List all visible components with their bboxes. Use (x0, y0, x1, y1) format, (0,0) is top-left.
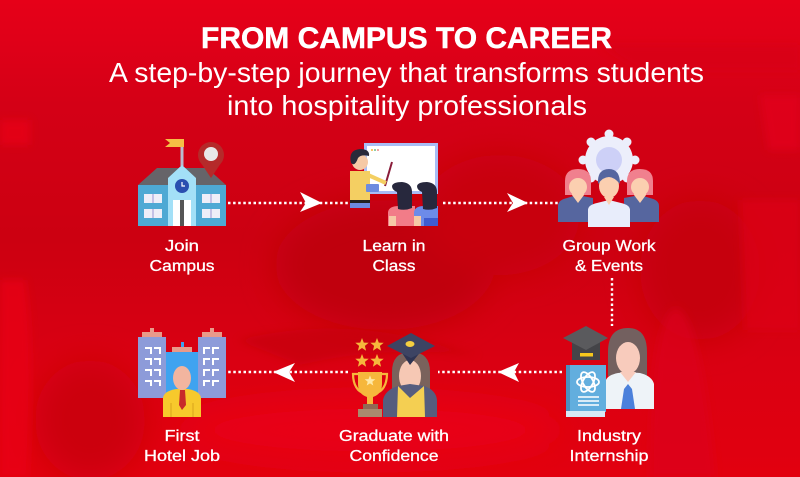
label: first hotel job: Hotel Job (144, 448, 220, 465)
label: learn in class: Class (372, 258, 416, 275)
icon: hotel building with employee (138, 328, 226, 417)
label: industry internship (570, 428, 649, 465)
label: join campus: Campus (150, 258, 214, 275)
title: FROM CAMPUS TO CAREER (201, 22, 612, 55)
subtitle: A step-by-step journey that transforms students (109, 57, 704, 88)
icon: graduate with trophy and stars (353, 333, 437, 417)
label: learn in class (362, 238, 426, 275)
icon: teacher at whiteboard with students (350, 143, 438, 226)
label: join campus: Join (165, 238, 199, 255)
arrow: join campus to learn in class (228, 192, 348, 212)
subtitle: into hospitality professionals (227, 90, 587, 121)
label: group work and events: & Events (575, 258, 643, 275)
label: join campus (150, 238, 214, 275)
icon: team with gear (558, 130, 659, 227)
arrow: learn in class to group work (443, 193, 558, 212)
label: group work and events (562, 238, 657, 275)
subtitle (109, 57, 704, 121)
label: first hotel job: First (164, 428, 200, 445)
label: first hotel job (144, 428, 220, 465)
icon: school with location pin (138, 139, 226, 226)
label: group work and events: Group Work (562, 238, 657, 255)
label: industry internship: Internship (570, 448, 649, 465)
label: graduate with confidence: Confidence (350, 448, 439, 465)
arrow: group work down to internship (611, 278, 613, 326)
label: learn in class: Learn in (362, 238, 426, 255)
label: graduate with confidence: Graduate with (339, 428, 449, 445)
arrow: graduate to first hotel job (228, 363, 348, 382)
label: industry internship: Industry (577, 428, 641, 445)
arrow: internship to graduate (438, 363, 562, 382)
label: graduate with confidence (339, 428, 449, 465)
icon: intern with cap and book (563, 326, 654, 417)
